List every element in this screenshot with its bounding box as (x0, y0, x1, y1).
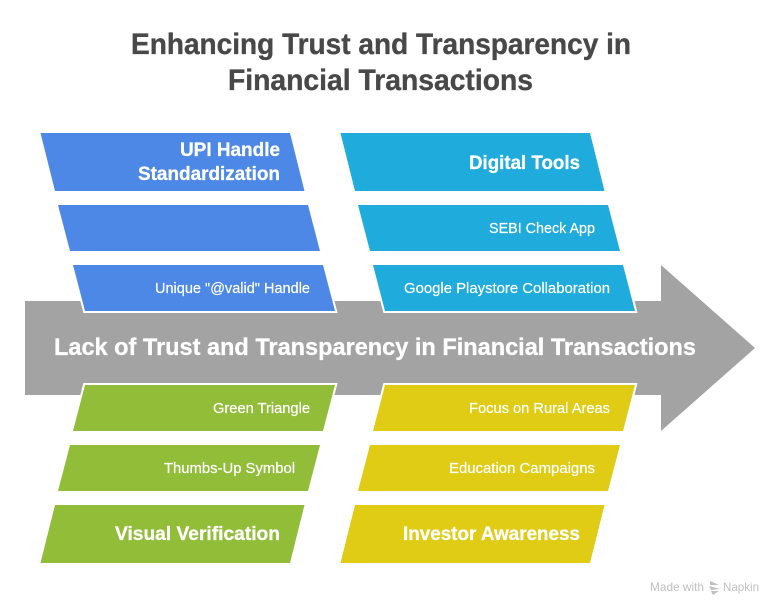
title: Enhancing Trust and Transparency in (131, 28, 631, 61)
panel: Green Triangle (73, 385, 335, 431)
panel: Google Playstore Collaboration (373, 265, 635, 311)
panel: UPI Handle Standardization: Standardization (138, 163, 280, 185)
title: Financial Transactions (228, 64, 533, 97)
title (131, 28, 631, 97)
panel: Thumbs-Up Symbol (58, 445, 320, 491)
panel: UPI Handle Standardization: UPI Handle (180, 139, 280, 161)
panel: SEBI Check App (358, 205, 620, 251)
panel: Investor Awareness (340, 505, 604, 563)
panel: Digital Tools: Digital Tools (469, 152, 580, 174)
panel: Unique @valid Handle: Unique "@valid" Handle (155, 281, 310, 297)
panel: Education Campaigns: Education Campaigns (449, 461, 595, 477)
watermark: Made with Napkin (650, 580, 759, 595)
central arrow: Lack of Trust and Transparency in Financial Transactions (54, 334, 696, 361)
panel: UPI Handle Standardization (40, 133, 304, 191)
panel: Visual Verification (40, 505, 304, 563)
watermark: Made with Napkin: Napkin (723, 580, 759, 594)
icon: Napkin logo (709, 581, 720, 595)
panel: Thumbs-Up Symbol: Thumbs-Up Symbol (164, 461, 295, 477)
panel: Google Playstore Collaboration: Google Playstore Collaboration (404, 281, 610, 297)
panel: Focus on Rural Areas: Focus on Rural Areas (469, 401, 610, 417)
panel: Unique @valid Handle (73, 265, 335, 311)
panel: Digital Tools (340, 133, 604, 191)
panel: SEBI Check App: SEBI Check App (489, 221, 595, 237)
central arrow (25, 265, 755, 431)
panel: Focus on Rural Areas (373, 385, 635, 431)
panel: Green Triangle: Green Triangle (213, 401, 310, 417)
panel: Investor Awareness: Investor Awareness (403, 523, 580, 545)
panel: Education Campaigns (358, 445, 620, 491)
watermark: Made with Napkin: Made with (650, 580, 704, 594)
panel: Visual Verification: Visual Verification (115, 523, 280, 545)
panel: empty blue bar (58, 205, 320, 251)
